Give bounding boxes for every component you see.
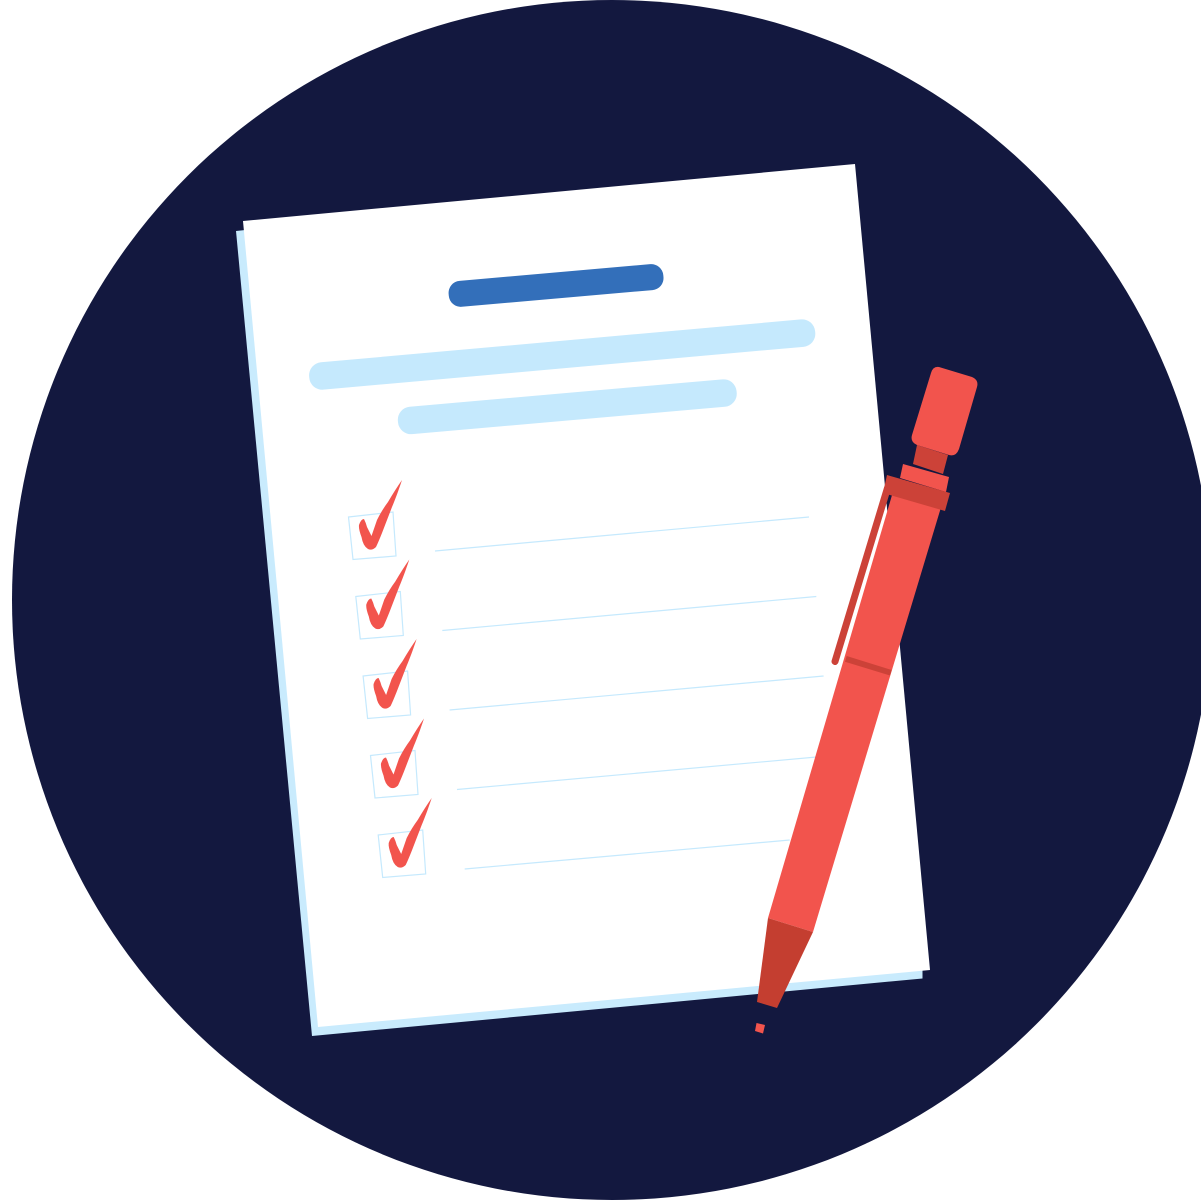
checklist item 2 xyxy=(356,560,816,639)
pen tip xyxy=(757,918,813,1008)
pen clip xyxy=(835,488,888,662)
pen collar xyxy=(900,464,949,492)
ink dot xyxy=(755,1023,765,1034)
subtitle bar long xyxy=(308,318,816,391)
pen body xyxy=(768,490,942,932)
checklist item 5 xyxy=(378,798,790,878)
pen cap xyxy=(912,367,977,455)
pen body ring xyxy=(845,656,892,676)
checklist item 1 xyxy=(348,480,809,560)
subtitle bar short xyxy=(397,378,738,435)
checklist item 4 xyxy=(370,718,822,798)
red pen xyxy=(755,367,977,1034)
document title bar xyxy=(448,263,665,308)
pen collar band xyxy=(883,475,950,511)
pen neck xyxy=(913,445,948,474)
checklist item 3 xyxy=(363,639,824,718)
white paper sheet xyxy=(243,164,930,1027)
paper shadow sheet xyxy=(236,230,922,1036)
